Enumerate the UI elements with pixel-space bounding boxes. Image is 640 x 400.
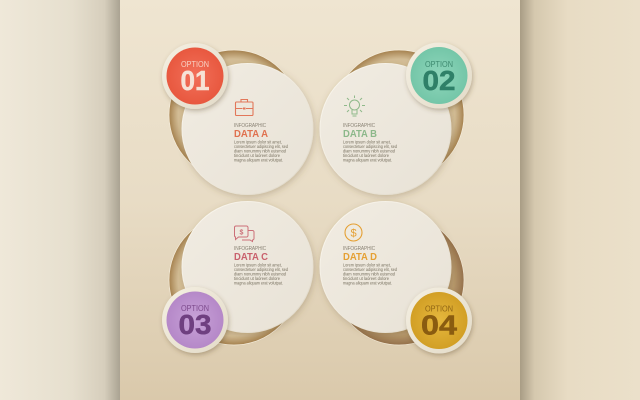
text block B: consectetuer adipiscing elit, sed [343, 144, 398, 149]
badge: option 04: OPTION [425, 304, 453, 314]
text block C: INFOGRAPHIC [234, 246, 266, 252]
cut-out crescent B [334, 50, 464, 180]
disc A [182, 64, 313, 194]
badge: option 04 [406, 288, 472, 354]
text block A [234, 123, 289, 162]
text block D: diam nonummy nibh euismod [343, 272, 396, 276]
text block D: tincidunt ut laoreet dolore [343, 276, 390, 281]
badge: option 04: 04 [421, 310, 457, 340]
text block C: diam nonummy nibh euismod [234, 272, 287, 276]
text block C: consectetuer adipiscing elit, sed [234, 267, 289, 272]
disc C [182, 202, 313, 332]
cut-out crescent C [169, 215, 299, 345]
text block C [234, 246, 289, 286]
text block D: consectetuer adipiscing elit, sed [343, 267, 398, 272]
text block D [343, 246, 398, 286]
icon: dollar coin: $ [350, 228, 357, 240]
text block B [343, 123, 398, 162]
text block A: magna aliquam erat volutpat. [234, 158, 283, 162]
badge: option 02 [406, 42, 472, 108]
text block B: magna aliquam erat volutpat. [343, 158, 392, 162]
text block A: tincidunt ut laoreet dolore [234, 153, 281, 158]
icon: light bulb [344, 96, 365, 116]
text block C: magna aliquam erat volutpat. [234, 280, 283, 286]
text block B: diam nonummy nibh euismod [343, 148, 396, 154]
icon: briefcase [236, 100, 253, 116]
text block B: INFOGRAPHIC [343, 123, 375, 129]
badge: option 03 [162, 287, 228, 353]
cut-out crescent A [169, 50, 299, 180]
text block A: DATA A [234, 128, 268, 140]
badge: option 02: 02 [422, 65, 456, 96]
badge: option 03: OPTION [181, 303, 209, 313]
badge: option 02: OPTION [425, 59, 453, 69]
icon: speech bubbles: $ [240, 230, 244, 236]
text block B: DATA B [343, 128, 377, 140]
text block A: consectetuer adipiscing elit, sed [234, 144, 289, 149]
badge: option 03: 03 [178, 309, 212, 340]
text block C: Lorem ipsum dolor sit amet, [234, 262, 282, 268]
panel: data D [320, 202, 472, 354]
text block A: Lorem ipsum dolor sit amet, [234, 140, 282, 144]
text block C: tincidunt ut laoreet dolore [234, 276, 281, 281]
disc D [320, 202, 451, 332]
text block D: Lorem ipsum dolor sit amet, [343, 262, 391, 268]
text block A: diam nonummy nibh euismod [234, 148, 287, 154]
text block B: Lorem ipsum dolor sit amet, [343, 140, 391, 144]
badge: option 01: 01 [180, 65, 210, 96]
badge: option 01: OPTION [181, 59, 209, 69]
text block A: INFOGRAPHIC [234, 123, 266, 129]
icon: speech bubbles [234, 226, 254, 242]
text block D: magna aliquam erat volutpat. [343, 280, 392, 286]
text block C: DATA C [234, 251, 268, 263]
panel: data B [320, 42, 472, 194]
text block B: tincidunt ut laoreet dolore [343, 153, 390, 158]
panel: data C [162, 202, 313, 353]
disc B [320, 64, 451, 194]
panel: data A [162, 43, 313, 194]
icon: dollar coin [345, 224, 362, 241]
cut-out crescent D [334, 215, 464, 345]
text block D: INFOGRAPHIC [343, 246, 375, 252]
text block D: DATA D [343, 251, 377, 263]
badge: option 01 [162, 43, 228, 109]
